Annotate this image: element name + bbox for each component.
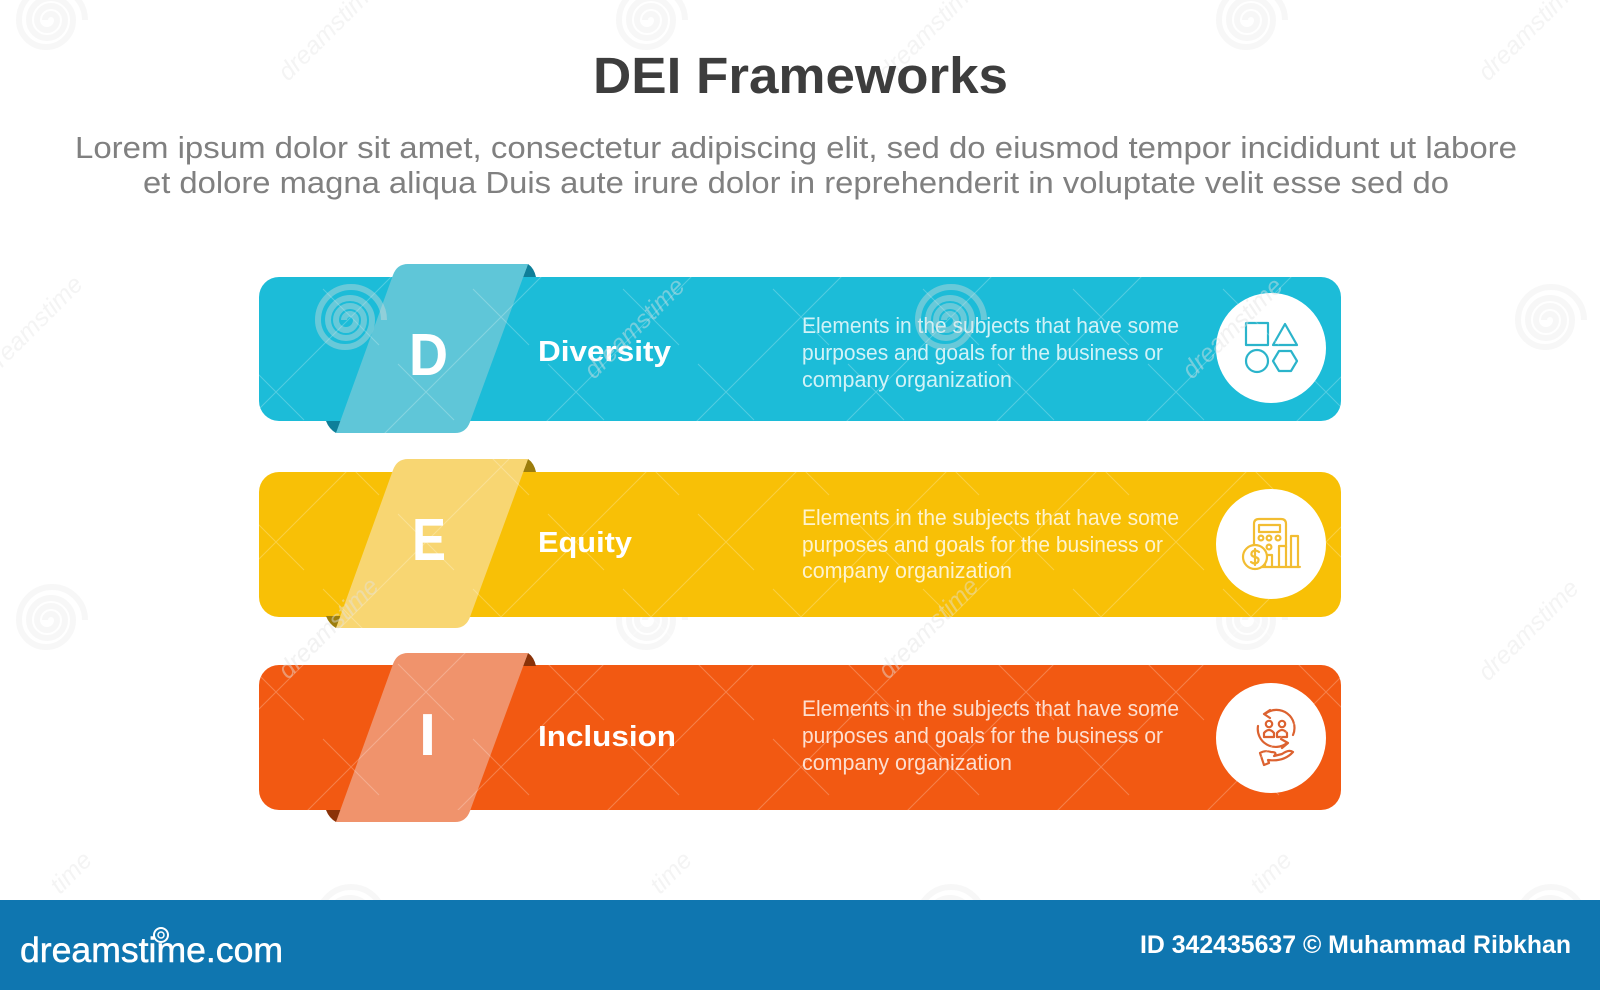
description: Equity [802, 505, 1179, 583]
icon: calculator and coin [1216, 489, 1326, 599]
bar: Equity background [259, 472, 1341, 617]
subtitle: et dolore magna aliqua Duis aute irure dolor in reprehenderit in voluptate velit esse sed do [143, 165, 1449, 200]
icon: shapes [1216, 293, 1326, 403]
ribbon: Equity [336, 459, 528, 628]
letter E: E [412, 507, 446, 573]
background watermark: overlay: dreamstime [272, 572, 385, 684]
letter D: D [409, 322, 448, 388]
description: Inclusion: company organization [802, 750, 1012, 775]
description: Diversity [802, 313, 1179, 392]
subtitle [75, 130, 1517, 200]
background watermark: overlay: dreamstime [578, 272, 691, 384]
ribbon: Diversity [336, 264, 528, 433]
panel: Diversity [259, 264, 1341, 433]
ribbon: Inclusion [336, 653, 528, 822]
background watermark: overlay [259, 272, 1341, 810]
panel: Inclusion [259, 653, 1341, 822]
background watermark: upper: time [644, 846, 698, 899]
description: Inclusion: purposes and goals for the business or [802, 723, 1163, 748]
icon: people in hand [1216, 683, 1326, 793]
description: Diversity: Elements in the subjects that have some [802, 313, 1179, 338]
description: Inclusion [802, 696, 1179, 775]
description: Inclusion: Elements in the subjects that have some [802, 696, 1179, 721]
background watermark: upper: time [44, 846, 98, 899]
description: Equity: purposes and goals for the business or [802, 532, 1163, 557]
footer logo: dreamstime.com [20, 931, 283, 970]
background watermark: upper: dreamstime [1472, 574, 1585, 686]
bar: Diversity background [259, 277, 1341, 421]
footer credit: ID 342435637 © Muhammad Ribkhan [1140, 931, 1571, 959]
background watermark: overlay: dreamstime [872, 572, 985, 684]
heading: Diversity: Diversity [538, 336, 671, 368]
background watermark: upper: time [1244, 846, 1298, 899]
description: Diversity: purposes and goals for the business or [802, 340, 1163, 365]
subtitle: Lorem ipsum dolor sit amet, consectetur adipiscing elit, sed do eiusmod tempor incididunt ut labore [75, 130, 1517, 165]
description: Equity: company organization [802, 558, 1012, 583]
heading: Inclusion: Inclusion [538, 721, 676, 753]
footer bar [0, 900, 1600, 990]
background watermark: overlay: dreamstime [1176, 272, 1289, 384]
description: Equity: Elements in the subjects that have some [802, 505, 1179, 530]
title: DEI Frameworks [593, 47, 1008, 104]
bar: Inclusion background [259, 665, 1341, 810]
panel: Equity [259, 459, 1341, 628]
description: Diversity: company organization [802, 367, 1012, 392]
letter I: I [419, 702, 436, 768]
heading: Equity: Equity [538, 527, 632, 559]
